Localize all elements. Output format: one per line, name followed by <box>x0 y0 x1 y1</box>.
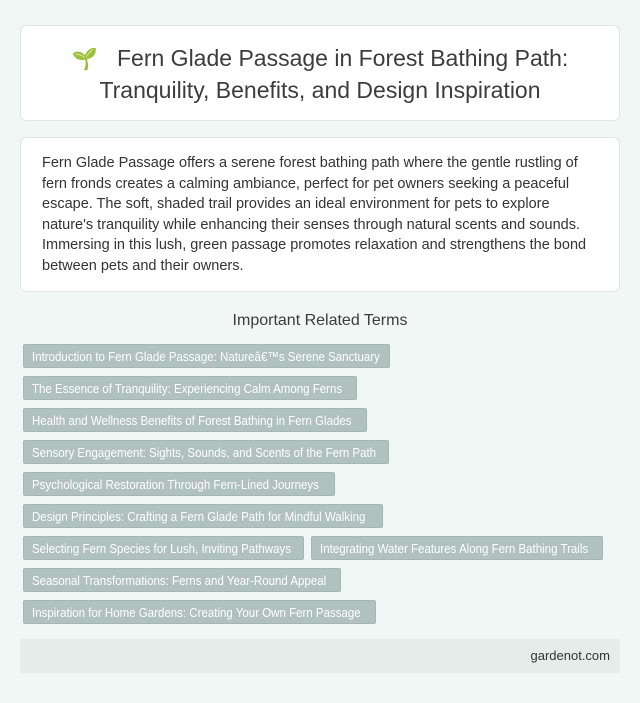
tag <box>23 376 357 400</box>
tag <box>23 536 304 560</box>
tag: Seasonal Transformations: Ferns and Year-Round Appeal <box>32 573 326 588</box>
footer <box>20 639 620 673</box>
tag: Integrating Water Features Along Fern Bathing Trails <box>320 541 588 556</box>
tag <box>23 408 367 432</box>
tag <box>311 536 603 560</box>
tag: Health and Wellness Benefits of Forest Bathing in Fern Glades <box>32 413 352 428</box>
title: Tranquility, Benefits, and Design Inspiration <box>99 77 541 103</box>
tag: Selecting Fern Species for Lush, Inviting Pathways <box>32 541 291 556</box>
tag: Sensory Engagement: Sights, Sounds, and Scents of the Fern Path <box>32 445 376 460</box>
tag <box>23 568 341 592</box>
description text: Fern Glade Passage offers a serene forest bathing path where the gentle rustling of fern fronds creates a calming ambiance, perfect for pet owners seeking a peaceful escape. The soft, shaded trail provides an ideal environment for pets to explore nature's tranquility while enhancing their senses through natural scents and sounds. Immersing in this lush, green passage promotes relaxation and strengthens the bond between pets and their owners. <box>42 155 586 274</box>
tag <box>23 504 383 528</box>
title <box>72 45 568 103</box>
tag: Design Principles: Crafting a Fern Glade Path for Mindful Walking <box>32 509 365 524</box>
footer text: gardenot.com <box>530 648 610 663</box>
tag <box>23 440 389 464</box>
section heading: Important Related Terms <box>233 312 407 329</box>
description card <box>20 137 620 292</box>
tag <box>23 600 376 624</box>
title card <box>20 25 620 121</box>
tag: Introduction to Fern Glade Passage: Natureâ€™s Serene Sanctuary <box>32 349 380 364</box>
tag: Inspiration for Home Gardens: Creating Your Own Fern Passage <box>32 605 361 620</box>
tag <box>23 344 390 368</box>
tag <box>23 472 335 496</box>
tag: The Essence of Tranquility: Experiencing Calm Among Ferns <box>32 381 342 396</box>
tag: Psychological Restoration Through Fern-Lined Journeys <box>32 477 319 492</box>
title: 🌱 Fern Glade Passage in Forest Bathing Path: <box>72 45 568 71</box>
